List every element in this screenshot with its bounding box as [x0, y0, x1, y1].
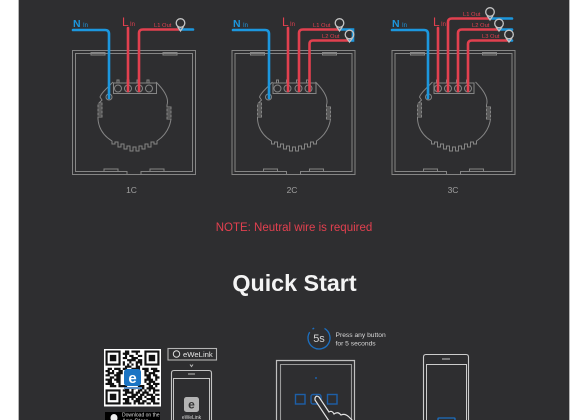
switch plate 2C: [232, 50, 355, 174]
bulb icons 2C: [335, 19, 354, 42]
wire labels 3C: L1 Out: [463, 12, 481, 18]
module outline 3C: [418, 80, 490, 151]
wires 3C: [392, 18, 512, 98]
instruction text: Press any button: [336, 332, 386, 339]
phone with app: [172, 370, 212, 420]
wire labels 3C: In: [441, 22, 446, 28]
touch buttons: [296, 394, 337, 404]
wire labels 2C: L: [282, 15, 289, 29]
icon: eWeLink logo on QR: e: [128, 370, 137, 387]
wire labels 2C: N: [233, 18, 241, 30]
switch plate 3C: [392, 50, 515, 174]
wire labels 1C: L: [122, 15, 129, 29]
diagram: 2C wiring: [232, 15, 355, 195]
switch plate 1C: [72, 50, 196, 174]
wire labels 3C: [392, 12, 500, 40]
wire labels 2C: In: [290, 22, 295, 28]
diagram: 1C wiring: [72, 15, 196, 195]
icon: pressing hand: [315, 396, 353, 420]
blue app button: [438, 418, 455, 420]
module outline 1C: [98, 80, 171, 151]
wall switch: [276, 360, 354, 420]
wire labels 1C: In: [130, 22, 135, 28]
wires 1C: [73, 28, 193, 98]
wire labels 2C: In: [243, 23, 248, 29]
diagram: 3C wiring: [392, 8, 515, 195]
wire labels 3C: L2 Out: [472, 23, 490, 29]
module outline 2C: [258, 80, 330, 151]
wire labels 2C: L2 Out: [322, 34, 340, 40]
wire labels 1C: L1 Out: [154, 23, 172, 29]
wire labels 1C: In: [83, 23, 88, 29]
phone on the right: [424, 354, 468, 420]
caption 3C: 3C: [448, 185, 458, 195]
icon: eWeLink logo on QR: [124, 369, 142, 389]
instruction text: for 5 seconds: [336, 340, 376, 348]
app store badge: Download on the: [122, 412, 160, 418]
caption 1C: 1C: [126, 185, 137, 195]
heading: Quick Start: Quick Start: [232, 270, 357, 296]
icon: eWeLink app: e: [188, 398, 195, 412]
bulb icons 3C: [486, 8, 513, 42]
wire labels 3C: L3 Out: [482, 34, 500, 40]
wire labels 1C: N: [73, 18, 81, 30]
bulb icon 1C: [176, 19, 185, 31]
timer icon: 5s: [304, 323, 334, 353]
wire labels 2C: L1 Out: [313, 23, 331, 29]
timer icon: 5s: 5s: [313, 333, 325, 345]
note: neutral wire: NOTE: Neutral wire is required: [216, 222, 372, 234]
wire labels 2C: [233, 15, 340, 40]
QR code: [104, 349, 161, 406]
wire labels 3C: L: [433, 15, 440, 29]
wire labels 3C: N: [392, 18, 400, 30]
search box: eWeLink: [168, 348, 216, 360]
caption 2C: 2C: [287, 185, 297, 195]
instruction text: [336, 332, 386, 348]
arrow down to phone: [190, 364, 193, 366]
app store badge: [105, 412, 160, 420]
wires 2C: [233, 28, 353, 98]
wire labels 1C: [73, 15, 172, 30]
search box: eWeLink: eWeLink: [183, 350, 213, 359]
wire labels 3C: In: [402, 23, 407, 29]
